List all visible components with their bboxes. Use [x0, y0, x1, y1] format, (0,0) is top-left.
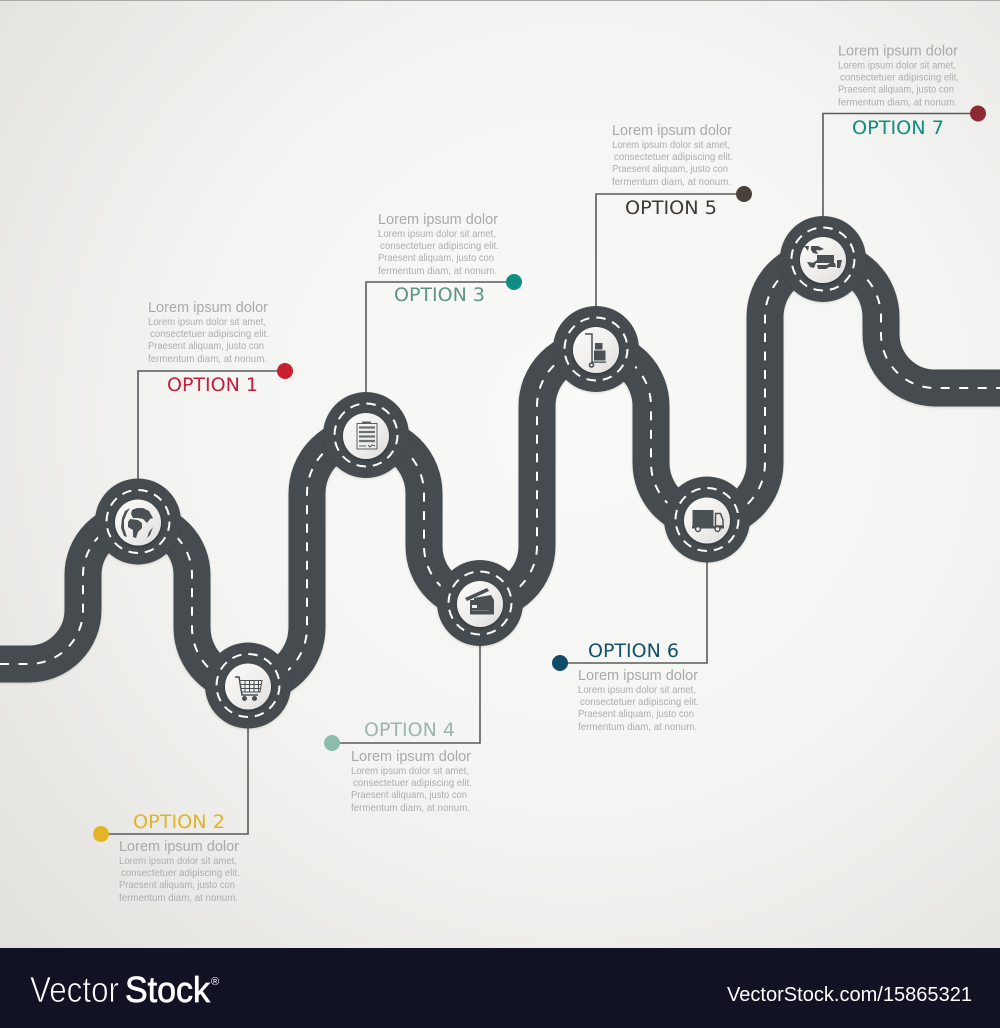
callout: option 1: consectetuer adipiscing elit. — [150, 328, 269, 340]
callout: option 3: consectetuer adipiscing elit. — [380, 240, 499, 252]
callout: option 1: Lorem ipsum dolor — [148, 300, 268, 316]
callout: option 5 — [596, 123, 752, 308]
callout: option 5: OPTION 5 — [625, 197, 717, 219]
stop 5: hand trolley — [553, 306, 639, 392]
stop 4: credit cards — [437, 560, 523, 646]
icon: credit cards — [465, 588, 494, 614]
callout: option 2: fermentum diam, at nonum. — [119, 892, 238, 904]
callout: option 6: Lorem ipsum dolor — [578, 668, 698, 684]
callout: option 2: Lorem ipsum dolor sit amet, — [119, 855, 237, 867]
stop 3: clipboard — [323, 392, 409, 478]
callout: option 2 — [93, 726, 248, 904]
callout: option 7: consectetuer adipiscing elit. — [840, 72, 959, 84]
stop 1: globe — [95, 478, 181, 564]
icon: puzzle hands — [804, 246, 842, 269]
callout: option 6: OPTION 6 — [588, 640, 679, 662]
callout: option 3: Lorem ipsum dolor — [378, 212, 498, 228]
icon: truck — [692, 510, 724, 532]
callout: option 4: OPTION 4 — [364, 719, 455, 741]
callout: option 6 — [552, 560, 707, 733]
icon: cart — [235, 677, 262, 700]
callout: option 6: Lorem ipsum dolor sit amet, — [578, 684, 696, 696]
stop 7: puzzle hands — [780, 216, 866, 302]
callout: option 1 — [138, 300, 293, 482]
icon: hand trolley — [585, 334, 606, 367]
callout: option 2: OPTION 2 — [133, 811, 225, 833]
callout: option 3: fermentum diam, at nonum. — [378, 265, 497, 277]
callout: option 3: Praesent aliquam, justo con — [378, 252, 494, 264]
callout: option 3 — [366, 212, 522, 395]
logo: VectorStock — [30, 969, 219, 1010]
callout: option 1: fermentum diam, at nonum. — [148, 353, 267, 365]
callout: option 4: Lorem ipsum dolor — [351, 749, 471, 765]
callout: option 2: Lorem ipsum dolor — [119, 839, 239, 855]
logo: VectorStock: Vector — [30, 969, 119, 1010]
callout: option 1: Lorem ipsum dolor sit amet, — [148, 316, 266, 328]
callout: option 5: consectetuer adipiscing elit. — [614, 151, 733, 163]
callout: option 7 — [823, 44, 986, 218]
callout: option 4: fermentum diam, at nonum. — [351, 802, 470, 814]
callout: option 3: OPTION 3 — [394, 284, 485, 306]
icon: globe — [121, 508, 153, 538]
callout: option 7: Praesent aliquam, justo con — [838, 84, 954, 96]
callout: option 6: fermentum diam, at nonum. — [578, 721, 697, 733]
winding road — [0, 259, 1000, 685]
logo: VectorStock: ® — [211, 976, 219, 988]
icon: clipboard — [357, 422, 377, 449]
callout: option 1: OPTION 1 — [167, 374, 258, 396]
callout: option 6: consectetuer adipiscing elit. — [580, 696, 699, 708]
callout: option 7: OPTION 7 — [852, 117, 944, 139]
stop 6: delivery truck — [664, 476, 750, 562]
callout: option 7: Lorem ipsum dolor — [838, 44, 958, 60]
callout: option 4: Praesent aliquam, justo con — [351, 789, 467, 801]
top edge — [0, 0, 1000, 1]
footer id text: VectorStock.com/15865321 — [727, 984, 972, 1006]
callout: option 7: fermentum diam, at nonum. — [838, 96, 957, 108]
callout: option 2: consectetuer adipiscing elit. — [121, 867, 240, 879]
callout: option 3: Lorem ipsum dolor sit amet, — [378, 228, 496, 240]
logo: VectorStock: Stock — [125, 969, 211, 1010]
stop 2: shopping cart — [205, 642, 291, 728]
callout: option 4: consectetuer adipiscing elit. — [353, 777, 472, 789]
footer bar — [0, 948, 1000, 1028]
callout: option 5: Lorem ipsum dolor sit amet, — [612, 139, 730, 151]
callout: option 5: Lorem ipsum dolor — [612, 123, 732, 139]
callout: option 5: fermentum diam, at nonum. — [612, 176, 731, 188]
callout: option 4: Lorem ipsum dolor sit amet, — [351, 765, 469, 777]
callout: option 4 — [324, 643, 480, 814]
callout: option 6: Praesent aliquam, justo con — [578, 708, 694, 720]
callout: option 1: Praesent aliquam, justo con — [148, 340, 264, 352]
callout: option 2: Praesent aliquam, justo con — [119, 879, 235, 891]
callout: option 7: Lorem ipsum dolor sit amet, — [838, 60, 956, 72]
callout: option 5: Praesent aliquam, justo con — [612, 163, 728, 175]
